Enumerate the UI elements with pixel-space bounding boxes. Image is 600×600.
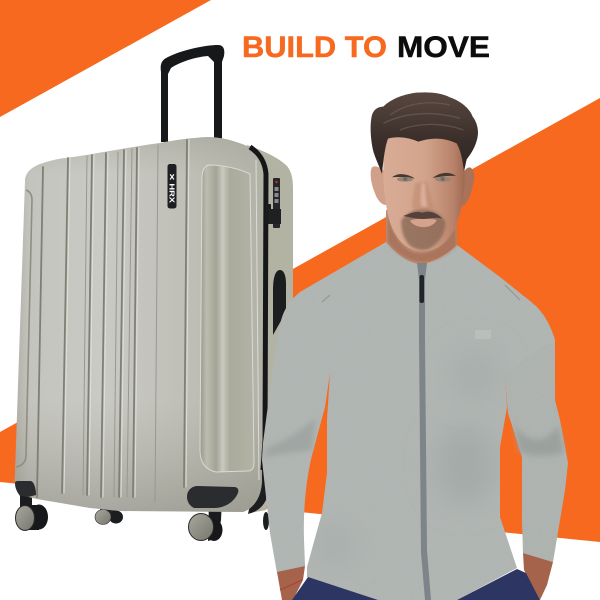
- jacket: left sleeve: [262, 292, 345, 573]
- jacket: torso: [300, 242, 555, 600]
- chest logo: [475, 330, 491, 339]
- icon: left wheel: [16, 494, 48, 530]
- suitcase: [15, 45, 293, 541]
- icon: side handle: [273, 270, 286, 335]
- nose: [412, 182, 434, 211]
- side trim: [256, 160, 259, 480]
- brows: [392, 173, 456, 179]
- torso shading: [441, 432, 488, 494]
- suitcase right corner panel: [200, 165, 254, 472]
- suitcase side panel: [247, 145, 293, 513]
- beard: [401, 209, 445, 250]
- neck: [386, 205, 457, 263]
- suitcase grooves: [37, 140, 189, 502]
- wheel housing right: [187, 486, 238, 508]
- face: [383, 135, 465, 251]
- icon: front wheel: [188, 500, 222, 541]
- suitcase rear edge: [248, 440, 272, 514]
- background: top-left orange triangle: [0, 0, 211, 117]
- suitcase front shell: [15, 137, 262, 512]
- brand badge: ✕ HRX: [168, 173, 175, 203]
- suitcase left corner panel: [16, 190, 32, 467]
- wheel housing left: [15, 481, 36, 497]
- eyes: [397, 177, 451, 182]
- icon: middle wheel: [95, 505, 123, 524]
- hair: [371, 92, 478, 174]
- hair highlights: [383, 103, 463, 130]
- icon: far wheel: [263, 512, 269, 530]
- left hand: [277, 566, 305, 600]
- icon: telescopic handle: [161, 45, 224, 142]
- head, drawn in 3× coordinates: [371, 92, 478, 263]
- man: [262, 92, 568, 600]
- jacket zipper: [417, 263, 431, 600]
- brand badge: [168, 164, 176, 208]
- right hand: [523, 553, 553, 600]
- ears: [371, 166, 474, 206]
- title: BUILD TO: [242, 31, 387, 64]
- combination lock: [265, 178, 281, 228]
- title: [242, 31, 490, 64]
- trousers: [292, 569, 540, 600]
- jacket: right sleeve: [505, 305, 568, 562]
- zipper: [250, 147, 266, 470]
- left elbow shading: [264, 418, 316, 458]
- raglan seam: [322, 285, 520, 302]
- title: MOVE: [397, 31, 490, 64]
- background: orange diagonal band: [0, 98, 600, 542]
- neck shadow: [387, 213, 457, 263]
- red thread: [280, 580, 302, 590]
- right elbow shading: [514, 425, 564, 456]
